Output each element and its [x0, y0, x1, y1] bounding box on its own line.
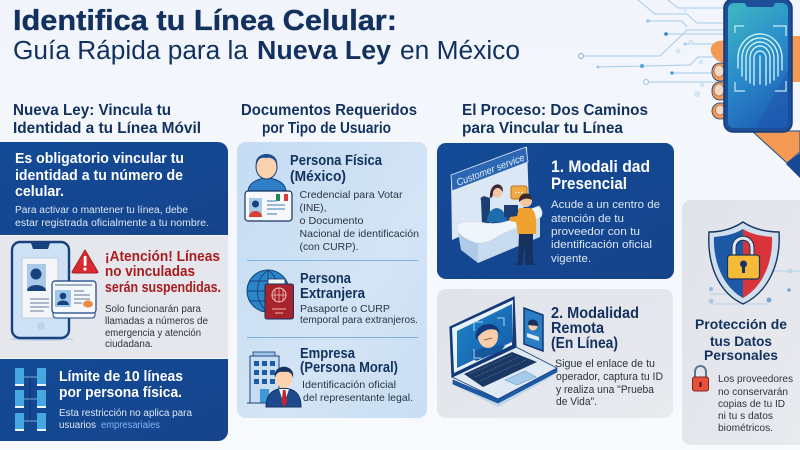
panel: documentos: (Persona Moral): [300, 360, 398, 376]
panel: documentos: temporal para extranjeros.: [300, 315, 418, 326]
panel: modalidad remota: Remota: [551, 320, 604, 337]
panel: modalidad presencial: 1. Modali dad: [551, 158, 650, 176]
panel: modalidad presencial: [437, 143, 674, 279]
panel: atencion: llamadas a números de: [105, 316, 209, 327]
panel: proteccion de datos: Los proveedores: [718, 374, 793, 385]
panel: modalidad presencial: Presencial: [551, 175, 627, 193]
panel: modalidad remota: y realiza una "Prueba: [556, 384, 655, 396]
heading: nueva ley: [13, 102, 201, 137]
panel: proteccion de datos: no conservarán: [718, 387, 788, 398]
panel: limite: Esta restricción no aplica para: [59, 408, 192, 419]
icon: small phone scan: [524, 308, 543, 351]
icon: phone with profile: [10, 242, 74, 341]
icon: small padlock: [692, 366, 708, 391]
heading: proceso: para Vincular tu Línea: [462, 120, 623, 137]
panel: obligatorio: identidad a tu número de: [15, 168, 183, 184]
panel: documentos: o Documento: [300, 216, 364, 227]
panel: proteccion de datos: [682, 200, 800, 445]
panel: documentos: (con CURP).: [300, 242, 358, 253]
heading: documentos: [241, 102, 417, 137]
icon: id card: [52, 281, 96, 318]
panel: limite: por persona física.: [59, 385, 182, 401]
panel: obligatorio: estar registrada oficialmente a tu nombre.: [15, 218, 209, 229]
panel: documentos: (México): [290, 169, 346, 185]
title: [13, 5, 520, 65]
icon: shield with padlock: [708, 222, 800, 304]
panel: modalidad presencial: Acude a un centro de: [551, 199, 660, 211]
panel: proteccion de datos: ni tu s datos: [718, 411, 773, 422]
panel: modalidad remota: de Vida".: [556, 396, 597, 408]
icon: hand holding phone with fingerprint: [711, 0, 800, 178]
title: Identifica tu Línea Celular:: [13, 5, 397, 37]
panel: documentos: [237, 142, 427, 418]
icon: customer service desk: [451, 147, 542, 265]
panel: obligatorio: Para activar o mantener tu línea, debe: [15, 205, 188, 216]
panel: documentos: (INE),: [300, 203, 326, 214]
panel: limite: Límite de 10 líneas: [59, 369, 183, 385]
panel: proteccion de datos: tus Datos: [710, 334, 772, 349]
panel: obligatorio: [0, 142, 228, 235]
panel: modalidad remota: (En Línea): [551, 335, 618, 352]
decorative circuit lines: [578, 0, 725, 85]
panel: modalidad presencial: vigente.: [551, 253, 591, 265]
panel: proteccion de datos: Personales: [704, 348, 778, 363]
heading: documentos: por Tipo de Usuario: [262, 120, 391, 137]
panel: documentos: Pasaporte o CURP: [300, 304, 390, 315]
panel: proteccion de datos: biométricos.: [718, 423, 773, 434]
icon: linked phones: [15, 368, 46, 431]
panel: atencion: emergencia y atención: [105, 328, 201, 339]
panel: proteccion de datos: Protección de: [695, 317, 787, 332]
panel: atencion: no vinculadas: [105, 264, 195, 280]
panel: documentos: Persona Física: [290, 153, 383, 169]
panel: atencion: serán suspendidas.: [105, 280, 221, 296]
icon: customer service desk: Customer service: [455, 153, 527, 189]
heading: proceso: El Proceso: Dos Caminos: [462, 102, 648, 119]
panel: atencion: ¡Atención! Líneas: [105, 249, 220, 265]
panel: modalidad remota: 2. Modalidad: [551, 305, 639, 322]
panel: obligatorio: Es obligatorio vincular tu: [15, 151, 184, 167]
panel: atencion: Solo funcionarán para: [105, 304, 202, 315]
panel: modalidad presencial: atención de tu: [551, 213, 624, 225]
icon: warning triangle: [72, 250, 98, 273]
panel: documentos: Credencial para Votar: [300, 190, 403, 201]
panel: documentos: Identificación oficial: [302, 380, 396, 391]
panel: modalidad remota: operador, captura tu ID: [556, 371, 663, 383]
panel: obligatorio: celular.: [15, 184, 64, 200]
icon: globe and passport: [247, 270, 294, 319]
panel: limite: usuarios: [59, 420, 96, 431]
panel: limite: [0, 359, 228, 441]
panel: limite: empresariales: [101, 420, 160, 431]
panel: atencion: [0, 236, 228, 358]
panel: documentos: del representante legal.: [303, 393, 413, 404]
panel: modalidad presencial: identificación oficial: [551, 239, 652, 251]
panel: modalidad remota: Sigue el enlace de tu: [555, 358, 655, 370]
panel: modalidad presencial: proveedor con tu: [551, 226, 640, 238]
heading: nueva ley: Identidad a tu Línea Móvil: [13, 120, 201, 137]
panel: documentos: Extranjera: [300, 286, 366, 302]
icon: persona fisica with id: [245, 154, 292, 221]
icon: laptop face scan: [448, 297, 557, 407]
panel: modalidad remota: [437, 289, 673, 418]
panel: documentos: Nacional de identificación: [300, 229, 419, 240]
title: Guía Rápida para la: [13, 37, 249, 65]
icon: company and representative: [247, 352, 301, 407]
heading: documentos: Documentos Requeridos: [241, 102, 417, 119]
panel: atencion: ciudadana.: [105, 339, 153, 350]
title: en México: [400, 37, 520, 65]
panel: documentos: Empresa: [300, 346, 356, 362]
heading: nueva ley: Nueva Ley: Vincula tu: [13, 102, 171, 119]
title: Nueva Ley: [257, 37, 392, 65]
panel: documentos: Persona: [300, 271, 352, 287]
panel: proteccion de datos: copias de tu ID: [718, 399, 785, 410]
heading: proceso: [462, 102, 648, 137]
